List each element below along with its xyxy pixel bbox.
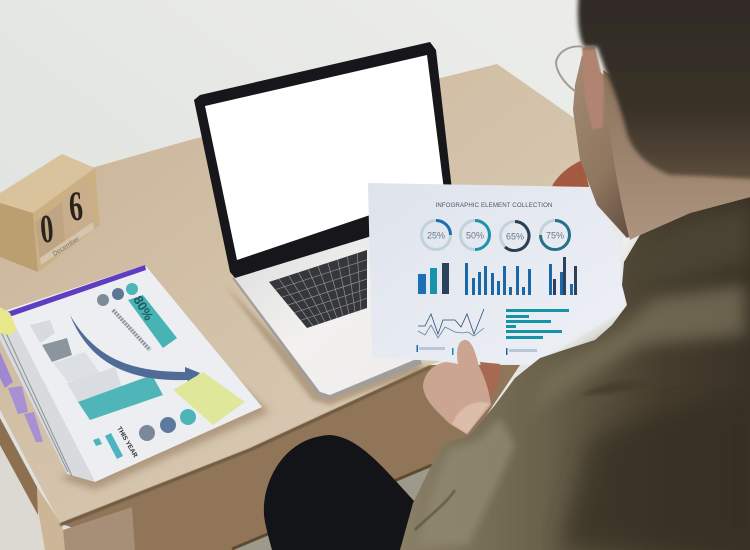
this year label: THIS YEAR <box>115 426 139 459</box>
legend markers <box>416 345 537 355</box>
bars <box>30 320 163 420</box>
paper sheet <box>368 183 625 365</box>
left side underside <box>0 418 38 515</box>
collar shade <box>632 205 750 285</box>
lower sheets <box>0 310 95 482</box>
laptop shadow <box>225 285 430 405</box>
wooden calendar <box>0 154 100 272</box>
document title: INFOGRAPHIC ELEMENT COLLECTION <box>436 202 552 209</box>
round markers <box>97 283 196 441</box>
laptop base <box>233 232 430 395</box>
wrist light <box>452 402 490 434</box>
jacket body <box>400 197 750 550</box>
sticky note <box>173 372 245 425</box>
black trousers <box>264 435 415 550</box>
donut 65 percent <box>500 222 530 250</box>
floor under the shelf <box>233 460 445 550</box>
shelf rail <box>232 465 432 549</box>
keyboard <box>269 250 367 328</box>
line chart <box>418 309 484 338</box>
neck <box>603 70 750 240</box>
digit 0: 0 <box>39 207 55 252</box>
holding hand <box>423 340 500 434</box>
purple stripe <box>7 265 146 317</box>
shoulder fold shadow <box>580 380 660 395</box>
purple tabs <box>0 352 13 388</box>
bar chart 3 <box>549 257 577 295</box>
shoulder highlight <box>530 285 745 415</box>
label strip <box>40 222 94 265</box>
glasses <box>556 46 584 91</box>
donut 65 percent: 65% <box>506 232 524 242</box>
fingers behind the document <box>552 160 590 190</box>
laptop base edge <box>232 240 422 399</box>
held document <box>368 183 625 365</box>
horizontal bar chart <box>506 309 569 339</box>
hair <box>578 0 750 180</box>
date block right <box>62 180 93 240</box>
desk leg side <box>37 487 66 550</box>
month label: December <box>52 235 81 258</box>
floor <box>0 420 70 550</box>
back shadow <box>560 400 750 550</box>
teal card <box>128 295 177 348</box>
laptop <box>194 42 452 405</box>
underside shelf <box>60 365 520 550</box>
sleeve highlight <box>418 418 515 545</box>
fingers under paper <box>480 362 500 400</box>
calendar front <box>33 168 100 272</box>
digit 6: 6 <box>67 182 85 230</box>
desk leg front <box>63 507 135 550</box>
face and jaw <box>573 55 650 238</box>
yellow tag <box>0 307 17 335</box>
man's jacket <box>400 197 750 550</box>
stack shadow <box>60 385 270 490</box>
arrow <box>70 315 200 383</box>
bar chart 2 <box>465 263 531 295</box>
screen <box>205 55 444 260</box>
key gaps <box>275 253 367 326</box>
desk top <box>0 64 600 523</box>
donut 75 percent <box>540 220 570 250</box>
laptop bezel <box>194 42 452 278</box>
donut 50 percent: 50% <box>466 230 484 240</box>
date block left <box>35 202 65 258</box>
sleeve crease <box>415 490 455 530</box>
small legend bars <box>105 433 123 459</box>
bar chart 1 <box>418 263 449 294</box>
sheet edges <box>0 320 72 476</box>
white gap beside the collar <box>622 238 636 262</box>
palm and thumb <box>423 340 491 434</box>
top sheet <box>7 265 262 482</box>
donut 25 percent: 25% <box>427 230 445 240</box>
paper stack <box>0 265 270 490</box>
donut 25 percent <box>422 220 450 250</box>
desk <box>0 64 600 550</box>
80 percent figure: 80% <box>130 293 157 323</box>
calendar top <box>0 154 95 213</box>
donut 50 percent <box>460 220 490 250</box>
desk front edge <box>60 367 430 525</box>
ear <box>582 47 603 130</box>
calendar side <box>0 203 38 272</box>
card text lines <box>113 310 150 350</box>
donut 75 percent: 75% <box>546 230 564 240</box>
